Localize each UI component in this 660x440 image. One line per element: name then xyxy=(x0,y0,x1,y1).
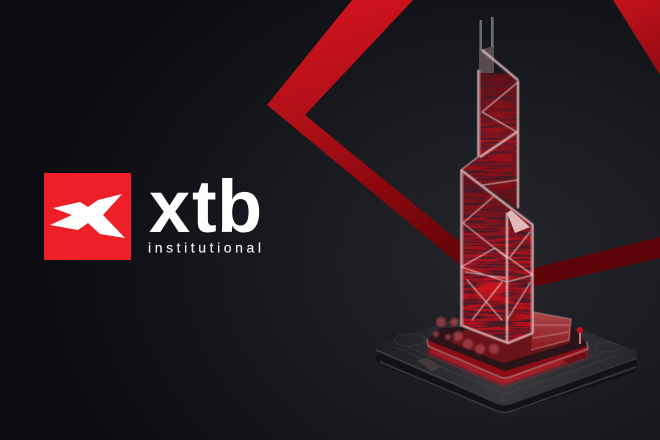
crown xyxy=(479,46,494,73)
podium body xyxy=(427,340,588,378)
antennas xyxy=(480,17,494,50)
top right red triangle xyxy=(613,0,660,75)
inner terrace xyxy=(450,330,570,363)
glass floor streaks xyxy=(461,73,533,343)
structural frame glow xyxy=(461,50,533,343)
small plinth left xyxy=(417,358,441,372)
red post xyxy=(577,327,583,344)
small plinth right xyxy=(563,352,587,364)
platform grooves xyxy=(394,334,619,393)
podium xyxy=(417,312,588,382)
logo subtitle: institutional xyxy=(148,240,261,256)
base platform xyxy=(376,305,637,414)
lower face xyxy=(461,170,533,343)
model trees xyxy=(433,317,499,354)
platform top xyxy=(377,305,637,404)
logo wordmark: xtb xyxy=(149,165,262,248)
upper face xyxy=(461,73,518,208)
red chevron frame xyxy=(267,0,460,265)
side block xyxy=(531,312,571,350)
glass panel xyxy=(507,210,530,233)
tower xyxy=(461,17,533,343)
logo xyxy=(44,165,262,260)
podium red glow xyxy=(429,350,587,382)
structural frame xyxy=(461,50,533,343)
right red band xyxy=(533,237,660,287)
platform lower layer xyxy=(376,345,637,414)
podium rim xyxy=(427,339,588,378)
bright core xyxy=(474,281,506,299)
logo mark xyxy=(44,173,131,260)
podium top xyxy=(427,322,588,371)
platform rim xyxy=(376,350,637,412)
